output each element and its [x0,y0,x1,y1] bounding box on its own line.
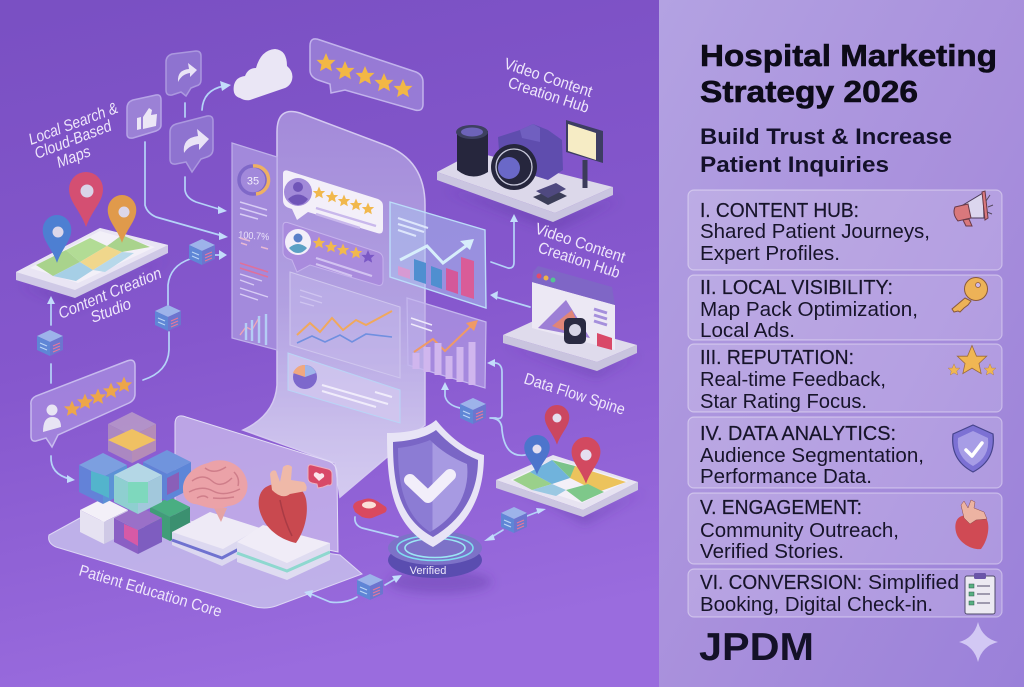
card: content hub: I. CONTENT HUB: [700,200,859,222]
isometric blocks [79,412,191,554]
pie [293,365,317,389]
illustration: isometric data platform [16,39,645,621]
background: illustration area [0,0,660,687]
icon: sparkle [959,622,998,662]
pin: red [69,172,103,227]
subtitle [700,124,952,177]
lens [456,125,488,177]
label: content creation studio: Content Creation [56,265,164,323]
label: verified: Verified [410,565,446,577]
line chart card [290,272,400,378]
card: reputation: Real-time Feedback, [700,369,886,391]
card: engagement: Community Outreach, [700,520,899,542]
card: local visibility: II. LOCAL VISIBILITY: [700,277,893,299]
label: video content hub (top): Creation Hub [506,75,591,117]
icon: cloud [234,49,292,100]
soft shadows [20,190,645,594]
camera platform: video content creation hub [437,120,613,222]
card: reputation [688,344,1002,413]
like bubble [308,465,332,488]
icon: heart [955,500,988,549]
card: reputation: III. REPUTATION: [700,347,854,369]
pie chart card [288,353,400,423]
label: video content hub (lower): Video Content [533,221,628,267]
card: data analytics: IV. DATA ANALYTICS: [700,423,896,445]
icon: arrow [178,63,197,82]
card: conversion [688,569,1002,617]
pin: blue [43,215,71,263]
logo: JPDM: JPDM [699,626,814,669]
icon: clipboard [965,573,995,614]
review card: purple [283,222,383,285]
icon: arrow [184,129,209,153]
card: content hub: Expert Profiles. [700,243,840,265]
block: white [80,498,128,544]
card: local visibility [688,275,1002,342]
card: reputation: Star Rating Focus. [700,391,867,413]
icon: brain [183,460,247,522]
like tile [127,95,161,138]
icon: key [952,278,988,312]
card: content hub: Shared Patient Journeys, [700,221,930,243]
card: conversion: Booking, Digital Check-in. [700,594,933,616]
icon: megaphone [954,191,993,226]
video light [566,120,603,188]
glass back panel [175,416,338,552]
block: magenta [114,506,162,554]
glass device sheet [243,112,425,497]
share tile: upper [166,51,201,96]
map sheet [510,459,628,503]
card: conversion: VI. CONVERSION: [700,572,862,594]
subtitle: Build Trust & Increase [700,124,952,149]
label: local search: Maps [54,143,93,172]
label: local search: Local Search & [26,100,120,149]
label: data flow spine: Data Flow Spine [522,371,627,419]
card: conversion: Simplified [868,572,959,594]
icon: heart [259,465,307,543]
title [700,38,997,109]
block: green [150,497,190,541]
pin: red top [545,405,569,445]
block: blue back [143,450,191,501]
map sheet [30,231,155,283]
label: video content hub (top): Video Content [502,56,595,101]
block: orange [108,412,156,463]
pedestal: heart [237,525,330,580]
bars [398,257,474,299]
card: engagement: Verified Stories. [700,541,844,563]
side dashboard panel [232,143,277,350]
mini bars [240,316,260,335]
stars [64,376,132,416]
alert tile [353,498,387,518]
block: teal [114,463,162,514]
card: local visibility: Local Ads. [700,320,795,342]
data cubes [37,239,527,600]
camera [491,124,563,190]
card: engagement: V. ENGAGEMENT: [700,497,862,519]
title: Hospital Marketing [700,38,997,73]
floor slab: patient education core [49,518,362,608]
icon: stars [948,346,996,375]
title: Strategy 2026 [700,74,918,109]
progress ring [239,166,269,194]
progress ring: 35 [247,176,259,188]
icon: thumbs up [137,108,157,130]
rating bubble [310,39,423,110]
share tile: lower [170,116,213,172]
pedestal [388,531,482,578]
stars [313,236,375,263]
pedestal: brain [172,512,260,566]
label: local search: Cloud-Based [32,117,115,163]
shield badge [387,420,484,578]
mountain image [538,300,590,338]
bars [416,342,472,385]
stars [313,186,374,214]
label: local search [26,100,120,172]
card: local visibility: Map Pack Optimization, [700,299,918,321]
trend arrow [400,243,470,263]
books [533,183,567,205]
card: content hub [688,190,1002,270]
browser window [532,266,615,350]
pin: blue [524,435,550,475]
block: blue left [79,453,127,504]
metric value: 100.7% [238,230,270,243]
panel: strategy sidebar [659,0,1024,687]
label: patient education core: Patient Education Core [77,563,224,621]
glass chart card: small bars [407,298,486,388]
subtitle: Patient Inquiries [700,152,889,177]
pin: red large [572,437,600,484]
data flow arrows [47,81,546,602]
reviewer bubble [31,360,135,447]
review card: white [283,170,383,234]
card: engagement [688,493,1002,564]
card: data analytics: Audience Segmentation, [700,445,924,467]
stars [316,53,412,97]
pin: orange [108,195,136,243]
map platform: right [496,405,638,517]
label: content creation studio: Studio [88,296,134,327]
label: video content hub (lower): Creation Hub [536,240,622,282]
map platform: left [16,172,168,298]
shield [387,420,484,547]
icon: shield [953,425,993,472]
card: data analytics: Performance Data. [700,466,872,488]
card: data analytics [688,417,1002,488]
glass chart card: rising bars [390,202,486,308]
browser platform: video content creation hub [503,266,637,371]
